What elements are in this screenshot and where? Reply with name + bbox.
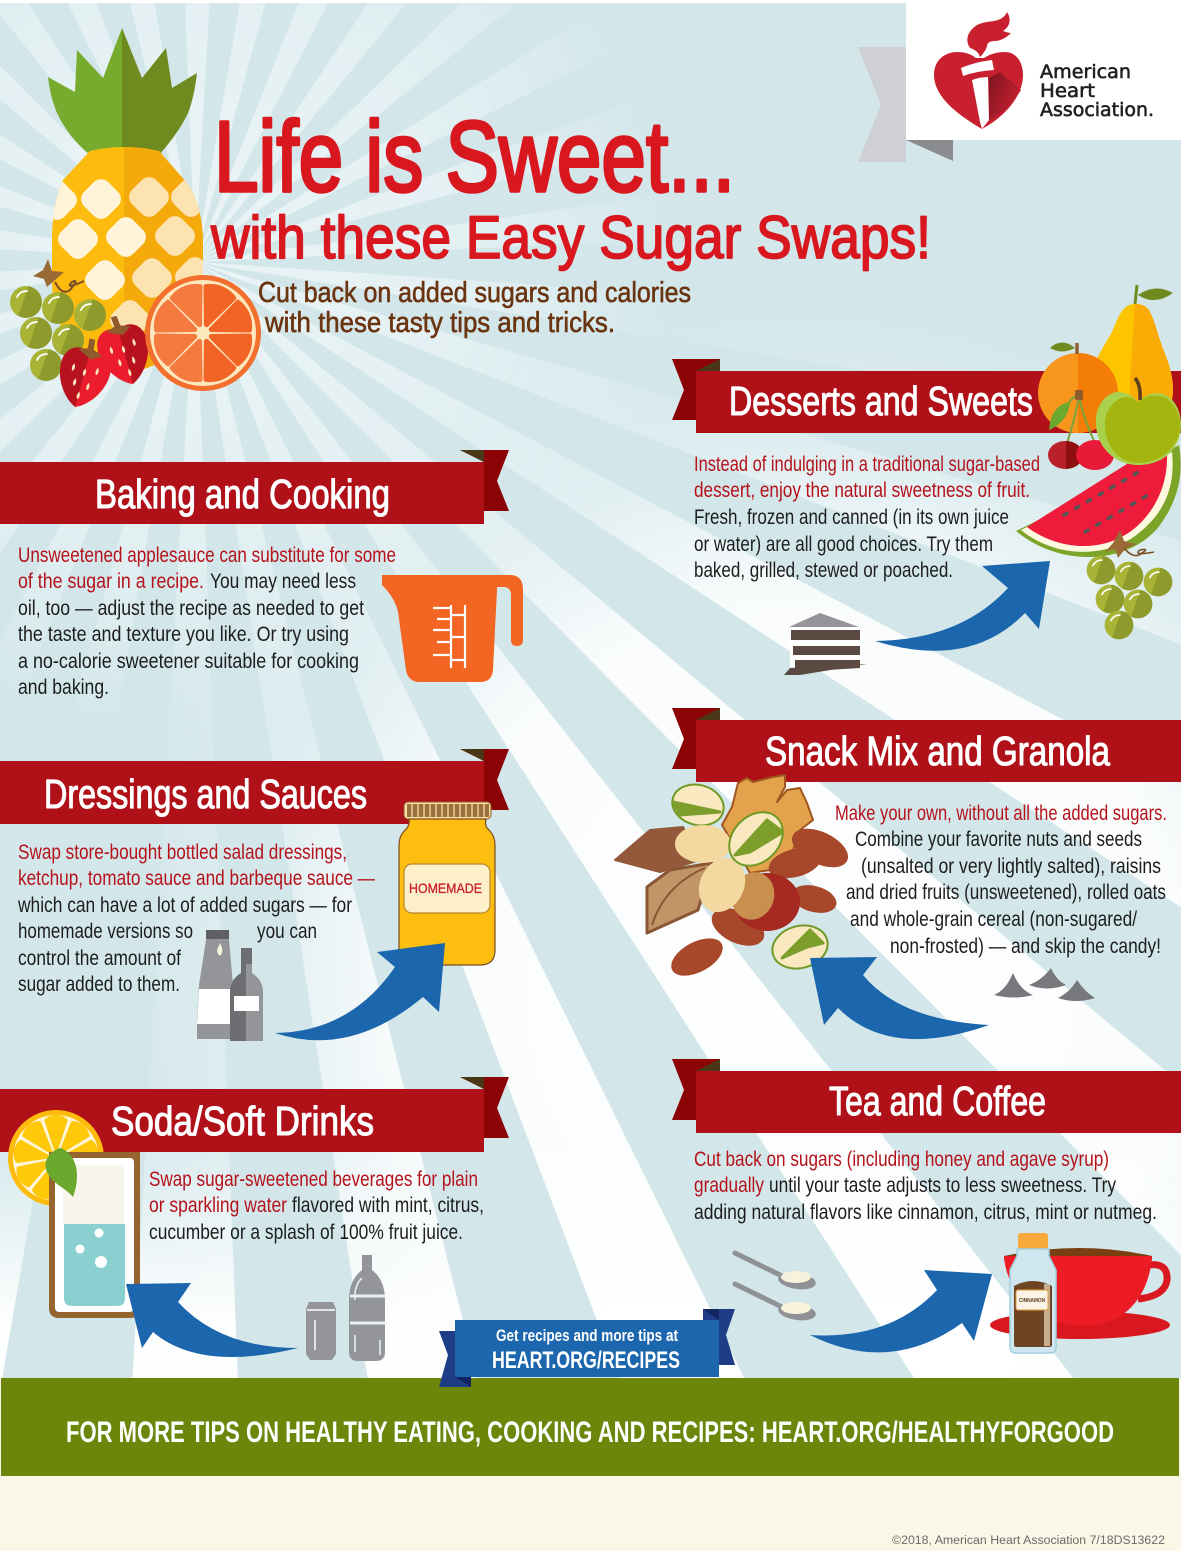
text: baking: a no-calorie sweetener suitable for cooking <box>18 650 359 673</box>
text: soda: or sparkling water <box>149 1194 287 1217</box>
icon: homemade jar: HOMEMADE <box>409 880 482 896</box>
text: tea: until your taste adjusts to less sweetness. Try <box>769 1174 1116 1197</box>
illustration: fruit pile <box>1016 285 1181 639</box>
icon: cake slice <box>784 613 867 675</box>
text: dressings: sugar added to them. <box>18 973 180 996</box>
banner: Desserts and Sweets: Desserts and Sweets <box>729 378 1033 424</box>
logo: American Heart Association <box>906 0 1200 140</box>
text: tea: Cut back on sugars (including honey and agave syrup) <box>694 1148 1109 1171</box>
banner: Tea and Coffee <box>672 1059 1181 1133</box>
banner: Dressings and Sauces <box>0 749 509 824</box>
icon: soda can and bottle <box>306 1255 385 1361</box>
banner: Soda/Soft Drinks: Soda/Soft Drinks <box>111 1098 374 1144</box>
arrow: chips to nuts <box>810 957 989 1039</box>
text: baking: of the sugar in a recipe. <box>18 570 204 593</box>
title: Life is Sweet... <box>214 101 735 213</box>
illustration: pineapple <box>48 28 203 369</box>
banner: Dressings and Sauces: Dressings and Sauces <box>44 771 367 817</box>
text: snack: and whole-grain cereal (non-sugared/ <box>850 908 1137 931</box>
text: desserts: Instead of indulging in a traditional sugar-based <box>694 453 1040 476</box>
icon: lemon slice <box>8 1110 104 1206</box>
arrow: cake to fruit <box>875 561 1050 651</box>
banner: Tea and Coffee: Tea and Coffee <box>829 1078 1046 1124</box>
icon: homemade jar <box>399 802 495 965</box>
text: dressings <box>17 841 375 996</box>
footer bar <box>0 1378 1181 1551</box>
icon: cinnamon bottle <box>1010 1233 1056 1353</box>
text: baking <box>18 544 396 699</box>
text: baking: Unsweetened applesauce can substitute for some <box>18 544 396 567</box>
text: dressings: ketchup, tomato sauce and barbeque sauce — <box>18 867 375 890</box>
logo: American Heart Association: Association. <box>1040 99 1154 121</box>
text: soda: flavored with mint, citrus, <box>292 1194 484 1217</box>
icon: chocolate chips <box>994 968 1095 1001</box>
text: dressings: homemade versions so <box>18 920 193 943</box>
illustration: orange slice <box>145 275 261 391</box>
icon: cinnamon bottle: CINNAMON <box>1019 1298 1045 1304</box>
arrow: soda to water <box>126 1283 298 1357</box>
text: dressings: you can <box>257 920 317 943</box>
logo: American Heart Association: American <box>1040 61 1131 83</box>
arrow: sugar to cinnamon <box>810 1270 992 1352</box>
subtitle: with these tasty tips and tricks. <box>264 307 615 339</box>
illustration: nut mix <box>615 775 854 983</box>
text: desserts: or water) are all good choices. Try them <box>694 533 993 556</box>
banner: Baking and Cooking: Baking and Cooking <box>95 471 390 517</box>
icon: glass of sparkling water <box>45 1148 140 1318</box>
text: soda: cucumber or a splash of 100% fruit juice. <box>149 1221 463 1244</box>
banner: Baking and Cooking <box>0 450 509 524</box>
illustration: strawberries <box>51 310 157 414</box>
icon: red cup and saucer <box>990 1248 1170 1339</box>
banner: Snack Mix and Granola: Snack Mix and Granola <box>765 728 1110 774</box>
ribbon: get recipes <box>439 1309 735 1387</box>
icon: measuring cup <box>382 575 523 682</box>
title <box>210 101 931 271</box>
text: soda <box>149 1168 484 1244</box>
illustration: grapes <box>10 259 106 381</box>
logo: American Heart Association: Heart <box>1040 80 1095 102</box>
illustration: gray corner ribbon <box>858 47 953 162</box>
arrow: to homemade jar <box>275 943 445 1040</box>
text: desserts <box>694 453 1040 582</box>
text: dressings: which can have a lot of added sugars — for <box>17 894 352 917</box>
text: baking: the taste and texture you like. Or try using <box>18 623 349 646</box>
text: baking: oil, too — adjust the recipe as needed to get <box>18 597 364 620</box>
text: dressings: control the amount of <box>18 947 181 970</box>
text: desserts: dessert, enjoy the natural sweetness of fruit. <box>694 479 1030 502</box>
ribbon: get recipes: Get recipes and more tips at <box>496 1326 678 1345</box>
text: baking: and baking. <box>18 676 109 699</box>
text: tea <box>694 1148 1157 1224</box>
text: snack <box>835 802 1167 958</box>
banner: Snack Mix and Granola <box>672 708 1181 782</box>
subtitle <box>258 277 691 339</box>
icon: store-bought bottles <box>197 930 263 1041</box>
banner: Desserts and Sweets <box>672 359 1181 433</box>
subtitle: Cut back on added sugars and calories <box>258 277 691 309</box>
text: desserts: Fresh, frozen and canned (in its own juice <box>694 506 1009 529</box>
title: with these Easy Sugar Swaps! <box>210 204 931 271</box>
banner: Soda/Soft Drinks <box>0 1077 509 1152</box>
text: dressings: Swap store-bought bottled salad dressings, <box>18 841 347 864</box>
ribbon: get recipes: HEART.ORG/RECIPES <box>492 1347 680 1374</box>
text: baking: You may need less <box>210 570 356 593</box>
icon: sugar spoons <box>735 1253 817 1323</box>
text: desserts: baked, grilled, stewed or poached. <box>694 559 953 582</box>
text: tea: gradually <box>694 1174 764 1197</box>
copyright: ©2018, American Heart Association 7/18DS13622 <box>892 1535 1165 1547</box>
text: snack: Combine your favorite nuts and seeds <box>855 828 1142 851</box>
text: soda: Swap sugar-sweetened beverages for plain <box>149 1168 478 1191</box>
